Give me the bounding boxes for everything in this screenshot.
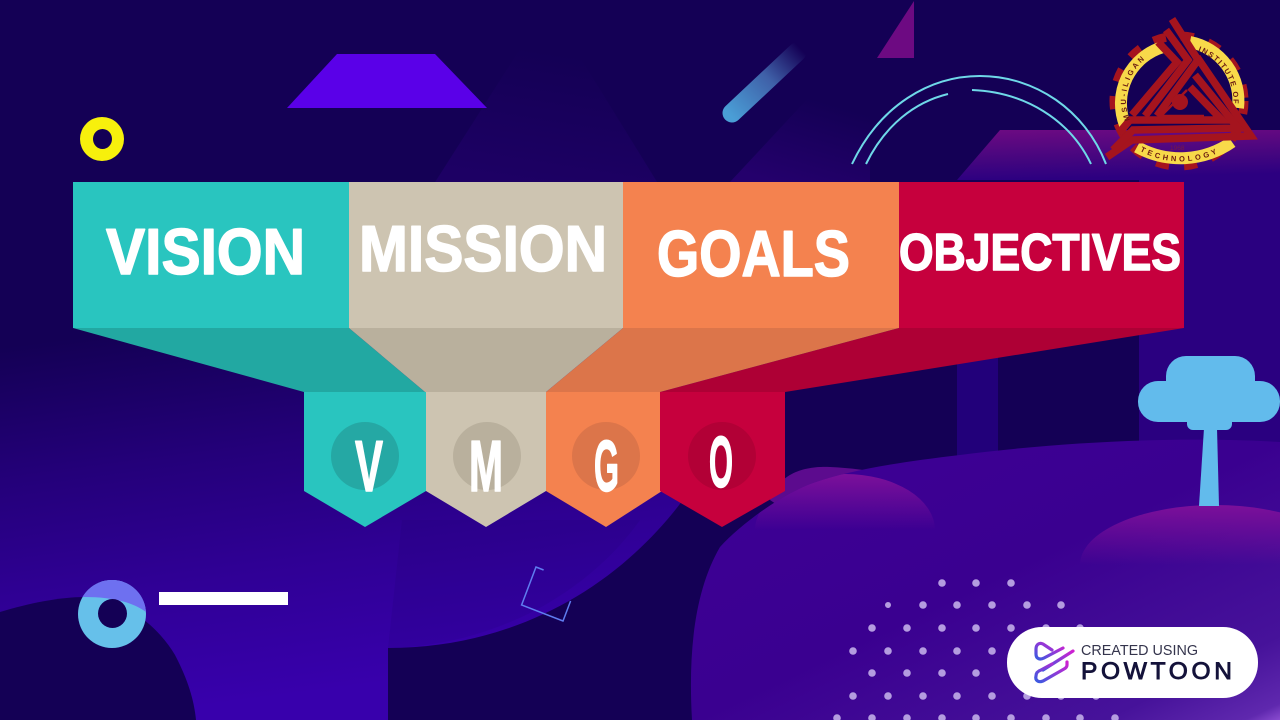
pennant: V: V: [355, 427, 383, 507]
funnel shade: red: [660, 328, 1184, 392]
right hill: [691, 440, 1280, 720]
seal text: MSU-ILIGAN: [1120, 56, 1144, 122]
pennant: G: [546, 392, 662, 527]
funnel shade: orange: [546, 328, 899, 392]
funnel shade: teal: [73, 328, 425, 392]
pennant: V: [304, 392, 426, 527]
yellow ring: [1121, 42, 1238, 158]
pennant: M: [426, 392, 546, 527]
inner triangle: [1161, 90, 1204, 116]
triangle bands: [1107, 19, 1251, 157]
icon: powtoon mark: [1036, 643, 1073, 682]
panel: vision: VISION: [106, 215, 305, 288]
seal text: [1120, 46, 1239, 162]
badge wordmark: POWTOON: [1081, 658, 1232, 685]
small hills: [756, 474, 1280, 558]
seal text: INSTITUTE OF: [1198, 46, 1239, 104]
pennant: M: M: [469, 427, 503, 507]
panel: mission: MISSION: [359, 212, 607, 285]
gear teeth: [1114, 36, 1244, 166]
panel: goals: GOALS: [657, 217, 850, 290]
funnel shade: beige: [349, 328, 623, 392]
icon: cloud tree: [1138, 356, 1280, 506]
centre dot: [1172, 94, 1188, 110]
back hill: [770, 467, 885, 520]
decoration: cyan arcs: [852, 76, 1106, 164]
badge: created using powtoon: [1007, 627, 1258, 698]
decoration: purple trapezoid: [287, 54, 487, 108]
seal text: TECHNOLOGY: [1142, 146, 1216, 162]
dot pattern: [833, 579, 1119, 720]
panel: objectives: OBJECTIVES: [899, 224, 1181, 282]
pennant: G: G: [594, 427, 619, 507]
icon: blue ring: [78, 580, 146, 648]
logo: institute seal: [1105, 17, 1258, 170]
pennant: O: [660, 392, 785, 527]
white bar: [159, 592, 288, 605]
panel: objectives: [899, 182, 1184, 328]
funnel chart: [73, 182, 1184, 527]
decoration: purple triangle: [877, 1, 914, 58]
badge text: CREATED USING: [1081, 643, 1198, 659]
panel: mission: [349, 182, 623, 328]
panel: vision: [73, 182, 349, 328]
pennant: O: O: [709, 423, 733, 503]
seal year: 1968: [1170, 145, 1185, 152]
decoration: bracket: [522, 567, 571, 621]
panel: goals: [623, 182, 899, 328]
decoration: blue streak: [732, 52, 797, 113]
icon: yellow ring: [80, 117, 124, 161]
